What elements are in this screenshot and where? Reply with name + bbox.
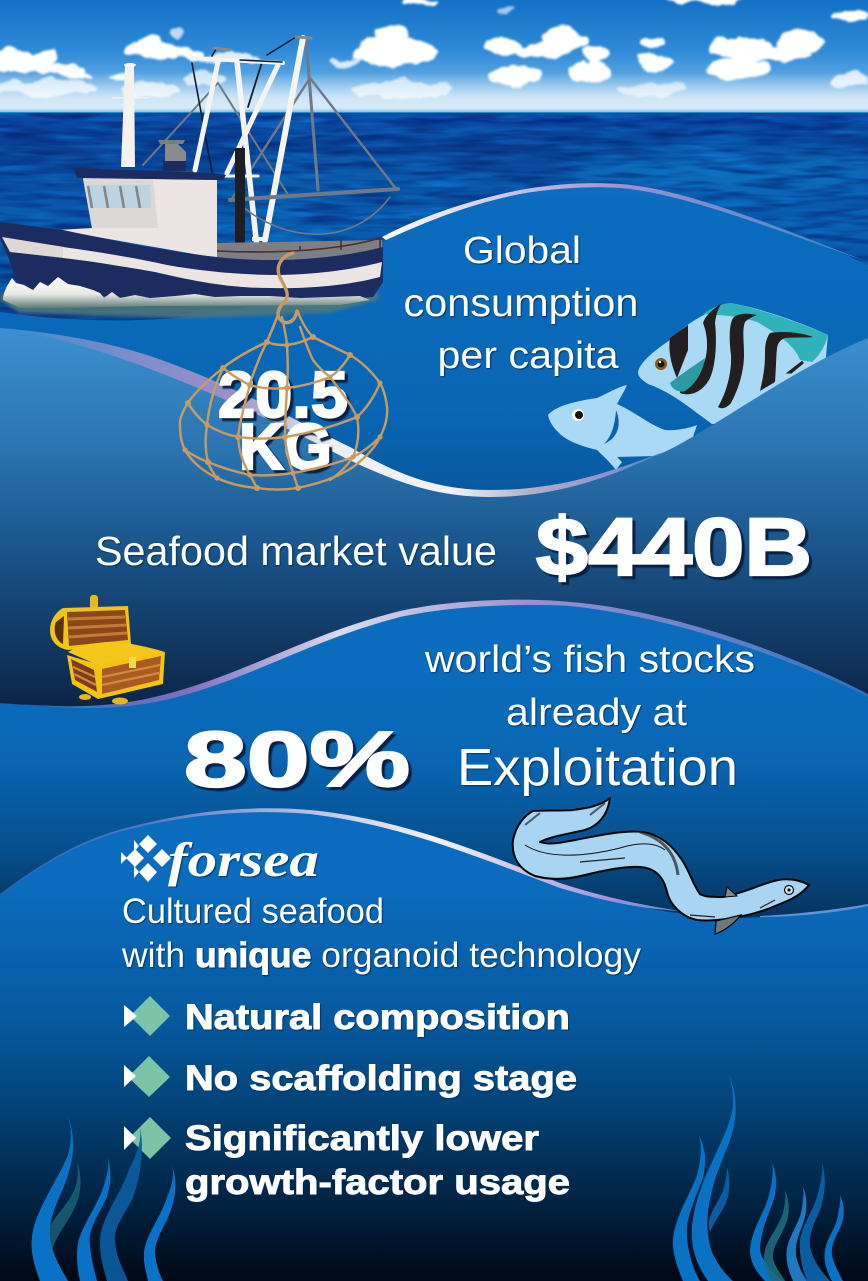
seaweed: right (673, 1073, 844, 1281)
logo mark (121, 835, 171, 882)
bullet: no scaffolding stage: No scaffolding stage (185, 1059, 577, 1098)
wave 2 highlight line (0, 328, 663, 497)
mast (112, 63, 150, 167)
stat: global consumption label (404, 230, 638, 377)
foam (3, 277, 370, 308)
cabin (57, 168, 226, 258)
logo wordmark: forsea (168, 832, 319, 887)
wave 4 right highlight (760, 904, 868, 917)
deck (217, 240, 382, 262)
stat: 20.5 KG: KG (239, 410, 332, 483)
logo: forsea (121, 832, 319, 887)
sky (0, 0, 868, 113)
wave 3 highlight line (20, 600, 868, 708)
black post (235, 148, 245, 257)
stat: global consumption label: Global (463, 230, 581, 272)
sea (0, 111, 868, 342)
funnel (158, 140, 186, 171)
wave: consumption panel (0, 185, 868, 560)
stat: fish stocks label: already at (506, 692, 687, 734)
icon: fishing boat (0, 37, 398, 318)
stat: $440B: $440B (536, 502, 812, 593)
horizon haze (0, 72, 868, 113)
icon: treasure chest (50, 595, 165, 704)
clouds (0, 0, 868, 99)
stat: fish stocks label (424, 639, 755, 797)
tagline (121, 892, 642, 975)
net rigging (143, 37, 398, 257)
icon: light blue fish (548, 385, 697, 470)
wave: exploitation panel (0, 603, 868, 930)
wave: market value panel (0, 328, 868, 730)
tagline: Cultured seafood (122, 892, 384, 931)
bullet: natural composition: Natural composition (185, 998, 570, 1037)
bullet: growth-factor usage (124, 1117, 570, 1202)
hull stripe (2, 237, 382, 288)
stat: fish stocks label: world’s fish stocks (424, 639, 755, 681)
wave 4 highlight line (0, 808, 680, 911)
rail (217, 238, 380, 252)
hull (0, 222, 383, 302)
net knots (182, 334, 383, 491)
wave 1 highlight line (382, 183, 868, 262)
bullet: growth-factor usage: Significantly lower (185, 1119, 539, 1158)
stat: 20.5 KG: 20.5 (218, 358, 348, 431)
seaweed: left (31, 1113, 175, 1281)
icon: eel (513, 798, 809, 934)
icon: striped angelfish (638, 303, 828, 424)
boat reflection (0, 293, 378, 318)
stat: 80%: 80% (184, 715, 410, 803)
stat: global consumption label: per capita (438, 335, 619, 377)
stat: seafood market value: Seafood market value (95, 528, 497, 574)
wave: forsea panel (0, 810, 868, 1281)
stat: fish stocks label: Exploitation (457, 739, 738, 797)
stat: global consumption label: consumption (404, 282, 638, 325)
tagline: with unique organoid technology (121, 936, 642, 975)
bullet: growth-factor usage: growth-factor usage (185, 1163, 570, 1202)
stat: 20.5 KG (218, 358, 348, 483)
icon: rope net (180, 253, 387, 491)
